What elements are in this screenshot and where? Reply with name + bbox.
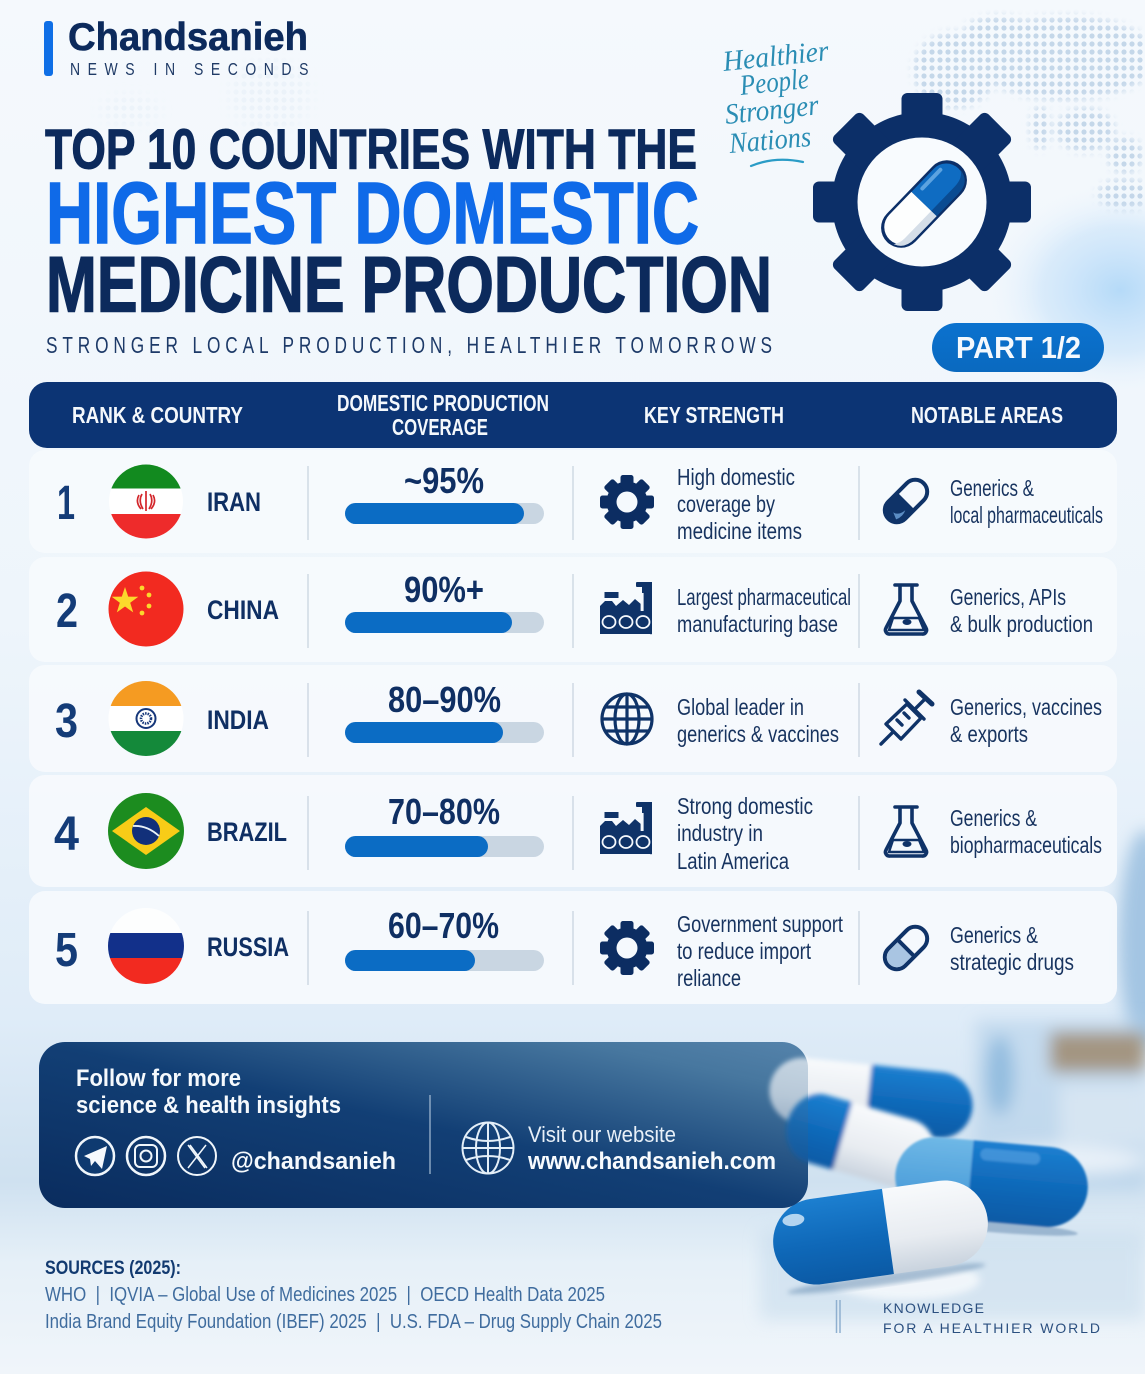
- sources: SOURCES (2025):: [45, 1258, 181, 1279]
- badge: part 1/2: [932, 323, 1104, 372]
- handwritten tagline: People: [738, 63, 810, 102]
- icon: globe: [602, 694, 652, 744]
- text: website: www.chandsanieh.com: [527, 1148, 776, 1175]
- table header: NOTABLE AREAS: [911, 402, 1063, 428]
- icon: instagram: [127, 1137, 165, 1175]
- text: follow for more: [76, 1065, 341, 1119]
- icon: factory: [600, 802, 652, 854]
- key strength: [677, 793, 813, 874]
- subtitle: STRONGER LOCAL PRODUCTION, HEALTHIER TOMORROWS: [46, 334, 772, 359]
- title: HIGHEST DOMESTIC: [46, 165, 699, 262]
- notable areas: & exports: [950, 721, 1028, 747]
- rank: 4: [54, 808, 79, 861]
- tagline: knowledge for a healthier world: FOR A HEALTHIER WORLD: [883, 1320, 1100, 1336]
- flag: China: [108, 572, 184, 646]
- coverage bar: ~95%: [404, 460, 484, 501]
- row 5: Russia: [29, 891, 1117, 1004]
- rank: 2: [56, 585, 78, 638]
- row 4: Brazil: BRAZIL: [207, 817, 287, 847]
- key strength: Largest pharmaceutical: [677, 584, 851, 610]
- flag: India: [108, 681, 184, 756]
- key strength: Government support: [677, 911, 843, 937]
- key strength: Global leader in: [677, 694, 804, 720]
- key strength: [677, 694, 839, 747]
- handwritten tagline: Nations: [727, 121, 812, 160]
- coverage bar: 80–90%: [388, 679, 501, 720]
- notable areas: [950, 805, 1102, 858]
- notable areas: Generics, vaccines: [950, 694, 1102, 720]
- coverage bar: [345, 569, 544, 633]
- flag: Russia: [108, 933, 184, 984]
- key strength: industry in: [677, 820, 763, 846]
- rank: 3: [55, 695, 78, 748]
- row 3: India: INDIA: [207, 705, 269, 735]
- notable areas: & bulk production: [950, 611, 1093, 637]
- key strength: coverage by: [677, 491, 775, 517]
- flag: Brazil: [108, 793, 184, 869]
- notable areas: [950, 584, 1093, 637]
- notable areas: [950, 694, 1102, 747]
- badge: part 1/2: PART 1/2: [956, 330, 1081, 365]
- sources: [45, 1258, 662, 1333]
- title: MEDICINE PRODUCTION: [46, 240, 772, 328]
- notable areas: Generics &: [950, 805, 1037, 831]
- notable areas: biopharmaceuticals: [950, 832, 1102, 858]
- notable areas: strategic drugs: [950, 949, 1074, 975]
- title: [45, 118, 772, 328]
- key strength: manufacturing base: [677, 611, 838, 637]
- key strength: Latin America: [677, 848, 789, 874]
- icon: capsule: [880, 475, 932, 527]
- icon: factory: [600, 582, 652, 634]
- logo: Chandsanieh: Chandsanieh: [68, 16, 308, 59]
- flag: Iran: [109, 464, 183, 538]
- logo: Chandsanieh: [44, 16, 308, 79]
- rank: 1: [57, 477, 75, 530]
- coverage bar: 90%+: [404, 569, 484, 610]
- coverage bar: 60–70%: [388, 905, 499, 946]
- coverage bar: [345, 679, 544, 743]
- key strength: generics & vaccines: [677, 721, 839, 747]
- row 4: Brazil: [29, 775, 1117, 887]
- key strength: reliance: [677, 965, 741, 991]
- text: follow for more: science & health insights: [76, 1092, 341, 1119]
- row 3: India: [29, 665, 1117, 772]
- notable areas: [950, 475, 1103, 528]
- key strength: High domestic: [677, 464, 795, 490]
- notable areas: [950, 922, 1074, 975]
- table header: RANK & COUNTRY: [72, 402, 243, 428]
- table header: DOMESTIC PRODUCTION: [337, 390, 549, 416]
- icon: syringe: [881, 692, 932, 744]
- text: website: Visit our website: [528, 1122, 676, 1147]
- handle: @chandsanieh: [231, 1148, 396, 1175]
- notable areas: Generics &: [950, 922, 1038, 948]
- icon: X: [178, 1137, 216, 1175]
- coverage bar: 70–80%: [388, 791, 500, 832]
- row 2: China: [29, 557, 1117, 662]
- key strength: [677, 464, 802, 544]
- title: TOP 10 COUNTRIES WITH THE: [45, 118, 697, 182]
- icon: gear: [600, 475, 654, 529]
- notable areas: Generics, APIs: [950, 584, 1066, 610]
- table header: [29, 382, 1117, 448]
- tagline: knowledge for a healthier world: [836, 1300, 1100, 1336]
- table header: COVERAGE: [392, 414, 488, 440]
- text: website: [527, 1122, 776, 1175]
- handwritten tagline: Stronger: [723, 89, 821, 131]
- icon: gear with capsule: [813, 93, 1031, 311]
- table header: KEY STRENGTH: [644, 402, 784, 428]
- key strength: [677, 584, 851, 637]
- handwritten tagline: [720, 35, 831, 166]
- notable areas: Generics &: [950, 475, 1034, 501]
- coverage bar: [345, 905, 544, 971]
- row 5: Russia: RUSSIA: [207, 932, 289, 962]
- icon: gear: [600, 921, 654, 975]
- row 1: Iran: [59, 464, 1102, 540]
- row 1: Iran: IRAN: [207, 487, 261, 517]
- sources: WHO | IQVIA – Global Use of Medicines 2025 | OECD Health Data 2025: [45, 1284, 605, 1306]
- tagline: knowledge for a healthier world: KNOWLEDGE: [883, 1300, 984, 1316]
- key strength: medicine items: [677, 518, 802, 544]
- handwritten tagline: Healthier: [720, 35, 831, 78]
- coverage bar: [345, 460, 544, 524]
- panel: follow and website: [39, 1042, 808, 1208]
- key strength: [677, 911, 843, 991]
- text: follow for more: Follow for more: [76, 1065, 241, 1092]
- row 2: China: CHINA: [207, 595, 279, 625]
- icon: capsule: [880, 922, 932, 974]
- sources: India Brand Equity Foundation (IBEF) 2025 | U.S. FDA – Drug Supply Chain 2025: [45, 1311, 662, 1333]
- capsule ends showing through the panel edge: [766, 1054, 808, 1164]
- logo: Chandsanieh: NEWS IN SECONDS: [70, 61, 308, 79]
- rank: 5: [55, 924, 78, 977]
- key strength: Strong domestic: [677, 793, 813, 819]
- photo: blue and white capsules with glass bottle: [760, 1020, 1145, 1320]
- icon: telegram: [76, 1137, 114, 1175]
- key strength: to reduce import: [677, 938, 811, 964]
- icon: flask: [885, 585, 927, 634]
- icon: flask: [885, 807, 927, 856]
- icon: globe: [462, 1122, 514, 1174]
- coverage bar: [345, 791, 544, 857]
